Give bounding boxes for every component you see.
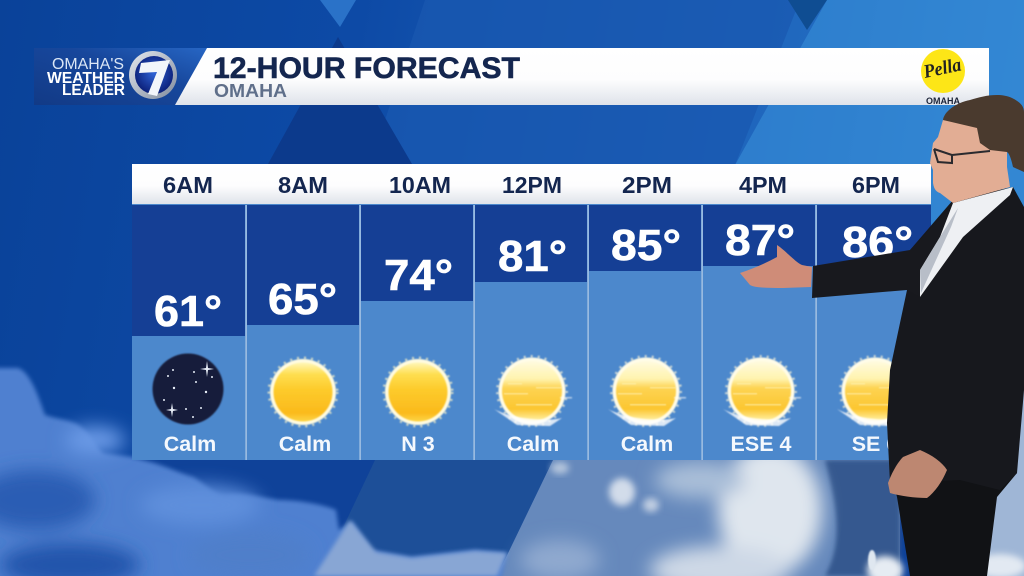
wind labels: Calm [621,432,673,456]
wind labels: Calm [164,432,216,456]
wind labels [164,432,898,456]
cloud shading [0,426,310,576]
time header row: 8AM [278,172,328,198]
presenter neck and face [930,120,1010,203]
dark sky parallelogram [320,460,553,576]
temperatures: 61° [154,287,222,336]
wind labels: SE 6 [852,432,898,456]
temperature bars [132,205,931,336]
wind labels: Calm [507,432,559,456]
time header row: 6PM [852,172,900,198]
presenter extended hand [740,245,812,288]
grey-blue cloud field [497,460,900,576]
presenter shirt and tie [920,187,1013,297]
light sky far right [985,370,1024,576]
temperatures: 85° [611,221,681,270]
wind labels: N 3 [401,432,435,456]
icon: sun 8AM [269,358,337,426]
heading: 12-HOUR FORECAST [213,52,520,85]
light column backgrounds [132,204,931,460]
temperatures: 65° [268,275,337,324]
temperatures: 81° [498,232,567,281]
icon: Pella sponsor logo [921,49,965,106]
logo panel [34,48,207,105]
icon: hazy sun 2PM [608,356,686,426]
presenter arm [812,205,953,298]
presenter jacket [887,187,1024,490]
wind labels: Calm [279,432,331,456]
title bar [34,48,989,106]
lower sky band [0,460,1024,576]
temperatures: 87° [725,216,795,265]
temperatures [154,216,913,336]
background: clouds along the bottom [0,368,1024,576]
temperatures: 86° [842,218,913,267]
icon: hazy sun 6PM [837,356,915,426]
white title panel [175,48,989,105]
icon: night sky moon [152,354,224,424]
pale cloud base [314,520,507,576]
wind labels: ESE 4 [731,432,792,456]
time header row: 12PM [502,172,562,198]
white cloud masses [520,445,822,576]
presenter lower hand [888,450,947,498]
logo panel: WEATHER [47,70,125,87]
temperatures: 74° [384,251,453,300]
presenter glasses [934,149,990,163]
time header row: 2PM [622,172,672,198]
subheading: OMAHA [214,81,287,101]
logo panel: OMAHA'S [52,56,124,73]
logo panel: LEADER [62,82,125,99]
time header row: 6AM [163,172,213,198]
time header row: 10AM [389,172,451,198]
presenter legs [890,470,1017,576]
column dividers [246,205,817,460]
time header row: 4PM [739,172,787,198]
presenter [740,95,1024,576]
icon: sun 10AM [384,358,452,426]
dark cloud gap at right [825,460,900,576]
icon: Pella sponsor logo: OMAHA [926,96,960,106]
icon: Pella sponsor logo: Pella [921,54,964,83]
forecast table [132,164,931,460]
time header row [132,164,931,204]
icon: channel 7 logo [129,51,177,99]
icon: hazy sun 12PM [494,356,572,426]
left cumulus cloud [0,368,507,576]
icon: hazy sun 4PM [723,356,801,426]
presenter hair [943,95,1024,172]
